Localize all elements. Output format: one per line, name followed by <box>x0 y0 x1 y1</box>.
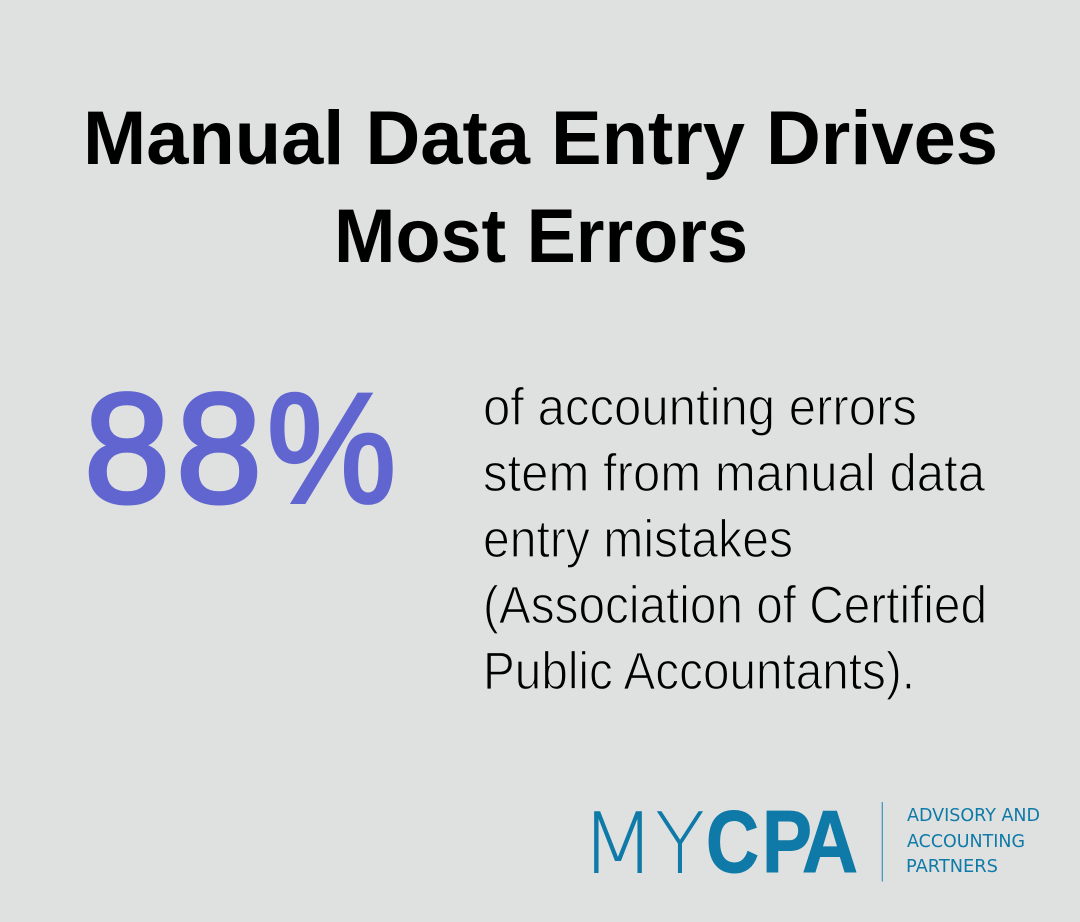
logo wordmark CPA: A <box>802 792 858 891</box>
statistic description: (Association of Certified <box>483 576 987 635</box>
logo tagline: PARTNERS <box>906 857 998 877</box>
logo wordmark MY: Y <box>655 795 705 894</box>
logo tagline: ACCOUNTING <box>907 832 1025 852</box>
logo wordmark CPA <box>706 792 858 891</box>
logo wordmark CPA: C <box>706 792 759 891</box>
statistic description: Public Accountants). <box>483 642 915 701</box>
logo: MYCPA advisory and accounting partners <box>580 792 1040 894</box>
title: Most Errors <box>334 194 748 279</box>
logo tagline <box>906 806 1040 877</box>
logo divider <box>882 802 883 882</box>
statistic description: of accounting errors <box>483 378 917 437</box>
title <box>83 96 998 279</box>
logo tagline: ADVISORY AND <box>907 806 1040 826</box>
title: Manual Data Entry Drives <box>83 96 998 181</box>
statistic description <box>483 378 987 701</box>
big statistic: 88% <box>84 362 396 536</box>
big statistic: 88%: 8 <box>176 362 262 536</box>
big statistic: 88%: 8 <box>84 362 170 536</box>
logo wordmark MY <box>580 795 705 894</box>
logo wordmark MY: M <box>580 795 656 894</box>
statistic description: stem from manual data <box>483 444 986 503</box>
statistic description: entry mistakes <box>483 510 793 569</box>
logo wordmark CPA: P <box>762 792 812 891</box>
big statistic: 88%: % <box>267 362 396 536</box>
